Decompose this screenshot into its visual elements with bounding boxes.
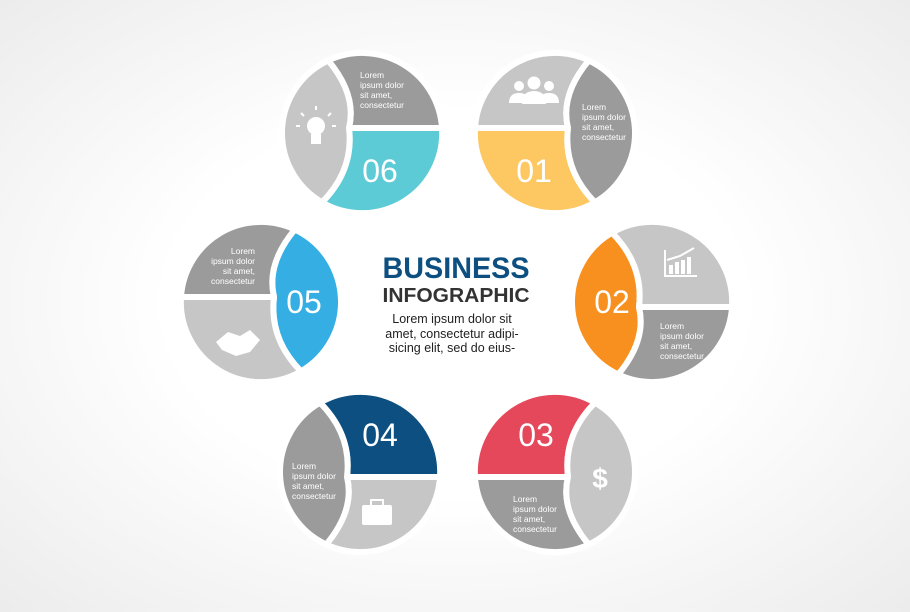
- circle 03: [475, 392, 635, 552]
- text blocks: consectetur: [360, 100, 404, 110]
- title: BUSINESS: [382, 252, 530, 285]
- text blocks: Lorem: [582, 102, 606, 112]
- numbers: 02: [594, 284, 630, 320]
- body text: amet, consectetur adipi-: [385, 327, 519, 341]
- text blocks: consectetur: [292, 491, 336, 501]
- text blocks: sit amet,: [292, 481, 324, 491]
- text blocks: ipsum dolor: [660, 331, 704, 341]
- circle 02: [572, 222, 732, 382]
- body text: [385, 312, 519, 355]
- icon: bulb: [296, 106, 336, 144]
- text blocks: ipsum dolor: [292, 471, 336, 481]
- circle 06: [282, 53, 442, 213]
- text blocks: Lorem: [513, 494, 537, 504]
- icon: dollar: $: [592, 463, 608, 494]
- circle 01: [475, 53, 635, 213]
- body text: Lorem ipsum dolor sit: [392, 312, 512, 326]
- icon: handshake: [216, 330, 260, 356]
- text blocks: sit amet,: [223, 266, 255, 276]
- numbers: 03: [518, 417, 554, 453]
- text blocks: sit amet,: [660, 341, 692, 351]
- text blocks: ipsum dolor: [360, 80, 404, 90]
- icon: chart: [665, 248, 697, 276]
- circle 04: [280, 392, 440, 552]
- text blocks: sit amet,: [360, 90, 392, 100]
- text blocks: ipsum dolor: [582, 112, 626, 122]
- numbers: 04: [362, 417, 398, 453]
- icon: briefcase: [362, 500, 392, 525]
- subtitle: INFOGRAPHIC: [382, 285, 530, 307]
- text blocks: sit amet,: [582, 122, 614, 132]
- text blocks: sit amet,: [513, 514, 545, 524]
- circle 05: [181, 222, 341, 382]
- numbers: 05: [286, 284, 322, 320]
- text blocks: consectetur: [513, 524, 557, 534]
- text blocks: consectetur: [582, 132, 626, 142]
- text blocks: consectetur: [211, 276, 255, 286]
- text blocks: Lorem: [360, 70, 384, 80]
- numbers: 06: [362, 153, 398, 189]
- numbers: 01: [516, 153, 552, 189]
- text blocks: Lorem: [292, 461, 316, 471]
- numbers: [286, 153, 630, 453]
- text blocks: [211, 70, 704, 534]
- icon: people: [509, 76, 559, 104]
- text blocks: ipsum dolor: [211, 256, 255, 266]
- text blocks: Lorem: [231, 246, 255, 256]
- text blocks: ipsum dolor: [513, 504, 557, 514]
- text blocks: consectetur: [660, 351, 704, 361]
- body text: sicing elit, sed do eius-: [389, 341, 515, 355]
- text blocks: Lorem: [660, 321, 684, 331]
